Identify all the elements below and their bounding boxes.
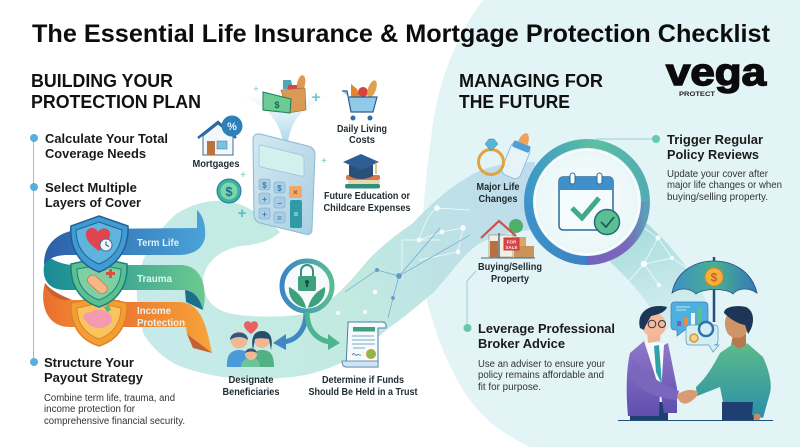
icon: calculator: − bbox=[277, 199, 282, 208]
ribbon: dark fold bbox=[185, 290, 203, 310]
background: flowing ribbon band bbox=[137, 162, 535, 379]
ribbon labels: Protection bbox=[137, 317, 185, 329]
icon: calculator bbox=[253, 134, 315, 234]
title: The Essential Life Insurance & Mortgage Protection Checklist bbox=[32, 20, 771, 48]
label: designate beneficiaries: Designate bbox=[228, 375, 274, 386]
step: broker advice: Use an adviser to ensure your bbox=[478, 359, 606, 370]
heading: managing for the future bbox=[459, 70, 603, 112]
background: network nodes bbox=[336, 206, 690, 315]
step: payout strategy bbox=[44, 355, 185, 427]
sparkles: + bbox=[238, 205, 247, 222]
background: light right panel bbox=[422, 0, 800, 447]
arrow: to beneficiaries bbox=[273, 312, 306, 350]
icon: money and groceries bbox=[263, 74, 307, 113]
ground line bbox=[618, 420, 773, 422]
step: regular policy reviews: Policy Reviews bbox=[667, 147, 759, 162]
sparkles: + bbox=[321, 156, 327, 167]
heading: managing for the future: THE FUTURE bbox=[459, 91, 570, 112]
icon: calculator: × bbox=[293, 188, 298, 197]
funnel bbox=[240, 95, 330, 142]
shield: income bbox=[71, 297, 127, 346]
label: daily living costs: Costs bbox=[349, 135, 375, 146]
step: broker advice: policy remains affordable and bbox=[478, 370, 604, 381]
label: trust bbox=[308, 375, 418, 398]
icon: money and groceries: $ bbox=[274, 100, 280, 110]
icon: dollar coin bbox=[217, 179, 241, 203]
payout description: Combine term life, trauma, and bbox=[44, 393, 175, 404]
icon: graduation cap and books bbox=[343, 154, 380, 188]
step: regular policy reviews: buying/selling property. bbox=[667, 192, 768, 203]
heading: building your protection plan bbox=[31, 70, 201, 112]
label: buying/selling property: Buying/Selling bbox=[478, 262, 542, 273]
ribbon: orange income protection bbox=[100, 302, 212, 353]
label: future education bbox=[324, 191, 411, 214]
man right bbox=[696, 306, 771, 420]
payout description bbox=[44, 393, 185, 427]
background: lower right swoosh bbox=[610, 222, 706, 332]
icon: property for sale: FOR bbox=[507, 240, 517, 244]
payout description: income protection for bbox=[44, 404, 136, 415]
sparkles: + bbox=[240, 170, 246, 181]
label: designate beneficiaries: Beneficiaries bbox=[222, 387, 280, 398]
icon: calendar bbox=[559, 173, 620, 234]
chart bubble bbox=[671, 302, 708, 336]
payout description: comprehensive financial security. bbox=[44, 416, 185, 427]
connector to broker step bbox=[467, 271, 476, 327]
gears bubble bbox=[686, 322, 719, 352]
icon: mortgage house: % bbox=[227, 121, 237, 133]
step: broker advice bbox=[464, 321, 615, 393]
man left bbox=[627, 306, 679, 420]
label: future education: Future Education or bbox=[324, 191, 410, 202]
step: broker advice: fit for purpose. bbox=[478, 382, 541, 393]
sparkles bbox=[238, 84, 327, 222]
layered ribbons bbox=[43, 210, 212, 353]
label: daily living costs: Daily Living bbox=[337, 124, 387, 135]
label: future education: Childcare Expenses bbox=[324, 203, 411, 214]
ribbon: orange back fold bbox=[43, 283, 120, 327]
shield: trauma bbox=[71, 258, 127, 307]
heading: building your protection plan: BUILDING YOUR bbox=[31, 70, 173, 91]
heading: managing for the future: MANAGING FOR bbox=[459, 70, 603, 91]
shield: term life bbox=[71, 216, 128, 272]
ribbon labels: Income bbox=[137, 305, 171, 317]
step: select layers bbox=[45, 180, 141, 210]
label: buying/selling property: Property bbox=[491, 274, 529, 285]
step: calculate coverage: Calculate Your Total bbox=[45, 131, 168, 146]
heading: building your protection plan: PROTECTION PLAN bbox=[31, 91, 201, 112]
arrow: to trust bbox=[307, 312, 340, 350]
icon: shopping cart bbox=[342, 79, 379, 120]
icon: lock and leaves circle bbox=[282, 261, 332, 311]
icon: calculator: = bbox=[277, 214, 282, 223]
icon: calculator: + bbox=[262, 210, 267, 219]
step: select layers: Select Multiple bbox=[45, 180, 137, 195]
label: daily living costs bbox=[337, 124, 387, 146]
ribbon labels bbox=[137, 237, 185, 329]
icon: ring and bottle bbox=[478, 129, 536, 180]
step: broker advice: Leverage Professional bbox=[478, 321, 615, 336]
step: regular policy reviews bbox=[652, 132, 782, 203]
label: major life changes bbox=[476, 182, 520, 205]
label: trust: Determine if Funds bbox=[322, 375, 404, 386]
label: trust: Should Be Held in a Trust bbox=[308, 387, 418, 398]
step: calculate coverage: Coverage Needs bbox=[45, 146, 146, 161]
ring with calendar bbox=[527, 142, 647, 262]
umbrella bbox=[672, 257, 757, 322]
icon: calculator: = bbox=[294, 210, 299, 219]
icon: calculator: + bbox=[262, 195, 267, 204]
umbrella: $ bbox=[711, 270, 718, 284]
step: regular policy reviews: Trigger Regular bbox=[667, 132, 763, 147]
ribbon: teal bbox=[44, 256, 205, 310]
icon: calculator: $ bbox=[277, 184, 282, 193]
sparkles: + bbox=[312, 89, 321, 106]
ribbon labels: Trauma bbox=[137, 273, 172, 285]
handshake bbox=[677, 390, 698, 404]
icon: family bbox=[227, 321, 274, 367]
step: regular policy reviews: Update your cover after bbox=[667, 169, 769, 180]
step: select layers: Layers of Cover bbox=[45, 195, 141, 210]
icon: dollar coin: $ bbox=[225, 184, 233, 199]
logo: vega protect: PROTECT bbox=[679, 91, 715, 98]
network hub bbox=[345, 228, 470, 318]
icon: certificate bbox=[342, 322, 386, 367]
label: designate beneficiaries bbox=[222, 375, 280, 398]
label: buying/selling property bbox=[478, 262, 542, 285]
icon: property for sale: SALE bbox=[505, 245, 518, 250]
step: calculate coverage bbox=[45, 131, 168, 161]
step: broker advice: Broker Advice bbox=[478, 336, 565, 351]
icon: property for sale bbox=[481, 219, 535, 258]
label: mortgages: Mortgages bbox=[192, 159, 240, 170]
ribbon: blue term life bbox=[44, 210, 205, 264]
step: regular policy reviews: major life changes or when bbox=[667, 180, 782, 191]
icon: mortgage house bbox=[198, 116, 242, 155]
logo: vega protect: vega bbox=[666, 52, 767, 94]
label: major life changes: Changes bbox=[478, 194, 518, 205]
step: payout strategy: Payout Strategy bbox=[44, 370, 144, 385]
step: payout strategy: Structure Your bbox=[44, 355, 134, 370]
icon: calculator: $ bbox=[262, 181, 267, 190]
connector to review step bbox=[596, 138, 656, 140]
sparkles: + bbox=[253, 84, 259, 94]
illustration: handshake under umbrella bbox=[618, 257, 773, 420]
ribbon labels: Term Life bbox=[137, 237, 179, 249]
label: major life changes: Major Life bbox=[476, 182, 520, 193]
timeline line and dots bbox=[30, 134, 38, 366]
